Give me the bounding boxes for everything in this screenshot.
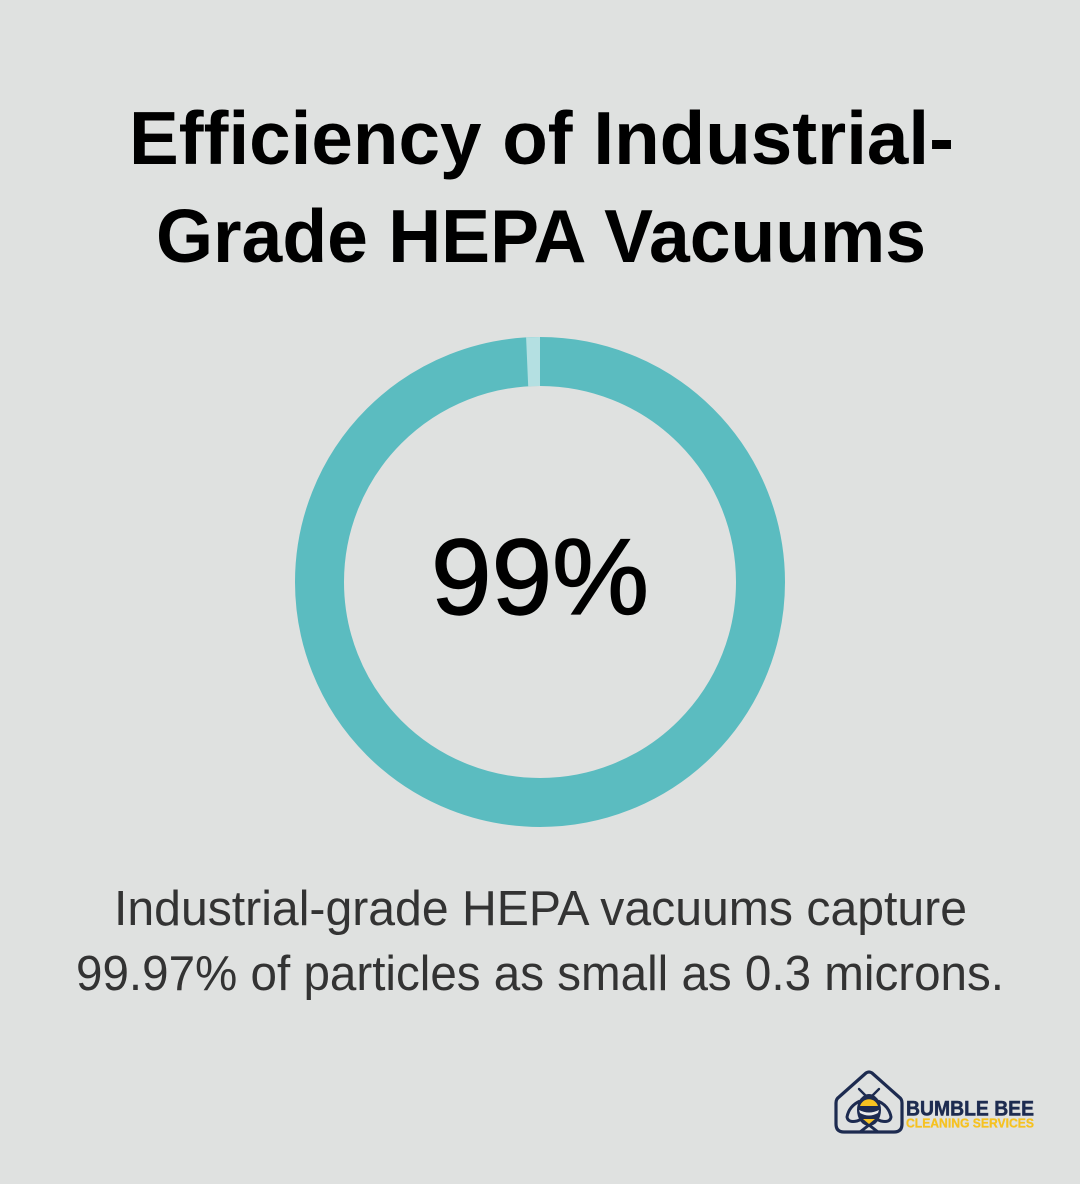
title: Efficiency of Industrial- (129, 96, 954, 180)
icon: house with bee (836, 1072, 902, 1132)
percentage value: 99% (431, 516, 649, 637)
description text (76, 882, 1004, 1001)
logo wordmark: BUMBLE BEE (906, 1098, 1034, 1120)
title (129, 96, 954, 278)
description text: Industrial-grade HEPA vacuums capture (114, 882, 967, 936)
logo tagline: CLEANING SERVICES (906, 1116, 1034, 1130)
title: Grade HEPA Vacuums (156, 194, 926, 278)
logo: Bumble Bee Cleaning Services (836, 1072, 1034, 1132)
description text: 99.97% of particles as small as 0.3 microns. (76, 947, 1004, 1001)
donut chart: 99% (320, 337, 760, 802)
